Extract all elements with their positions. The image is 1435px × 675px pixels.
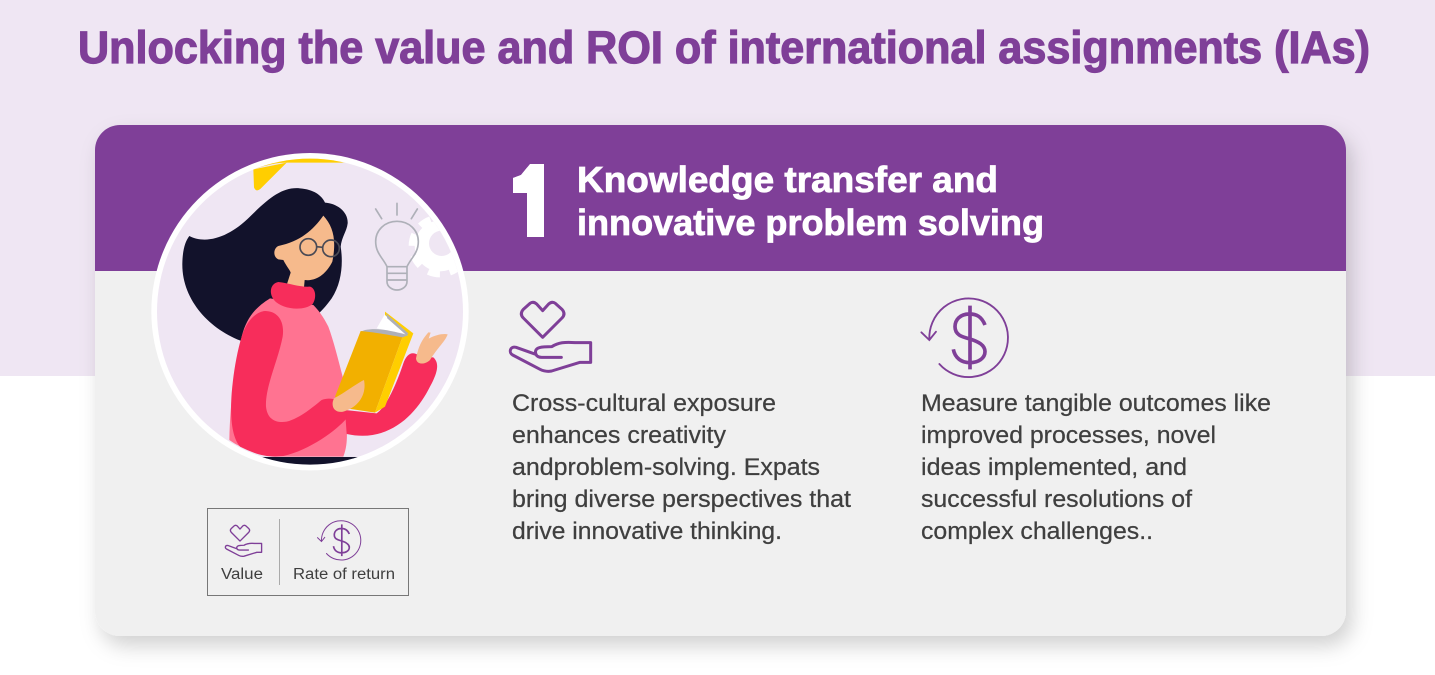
background band [0, 0, 1435, 376]
text block: rate of return: complex challenges.. [921, 518, 1153, 545]
panel: knowledge transfer card [95, 125, 1346, 636]
text block: rate of return [921, 390, 1271, 545]
panel heading: innovative problem solving [577, 202, 1044, 243]
icon: rate of return dollar [921, 298, 1008, 377]
panel header band [95, 125, 1346, 271]
text block: value: drive innovative thinking. [512, 518, 782, 545]
text block: value: bring diverse perspectives that [512, 486, 851, 513]
hands [333, 380, 365, 412]
illustration: woman reading a book [151, 153, 469, 470]
sweater [229, 298, 347, 457]
hair [182, 188, 348, 342]
icon: heart in hand [510, 302, 591, 371]
collar [271, 282, 315, 309]
legend icon: rate of return [317, 521, 361, 560]
text block: value: Cross-cultural exposure [512, 390, 776, 417]
text block: value: andproblem-solving. Expats [512, 454, 820, 481]
panel heading: Knowledge transfer and [577, 159, 998, 200]
light bulb [376, 203, 418, 290]
text block: rate of return: improved processes, novel [921, 422, 1216, 449]
text block: value: enhances creativity [512, 422, 726, 449]
panel heading [577, 159, 1044, 243]
near sleeve [231, 311, 347, 457]
glasses [300, 239, 339, 257]
text block: rate of return: successful resolutions of [921, 486, 1192, 513]
number 1: 1 [505, 144, 563, 260]
legend [208, 508, 408, 596]
legend label: rate of return: Rate of return [293, 566, 395, 583]
legend label: value: Value [221, 566, 263, 583]
right arm [345, 353, 437, 436]
text block: value [512, 390, 851, 545]
bottom dark shape [262, 457, 358, 465]
face [274, 216, 334, 287]
gear [412, 218, 468, 274]
yellow corner shape [253, 157, 350, 190]
title: Unlocking the value and ROI of international assignments (IAs) [78, 22, 1370, 73]
book pages [376, 314, 404, 334]
legend icon: value [225, 525, 262, 556]
book cover [335, 331, 402, 413]
text block: rate of return: ideas implemented, and [921, 454, 1187, 481]
text block: rate of return: Measure tangible outcomes like [921, 390, 1271, 417]
